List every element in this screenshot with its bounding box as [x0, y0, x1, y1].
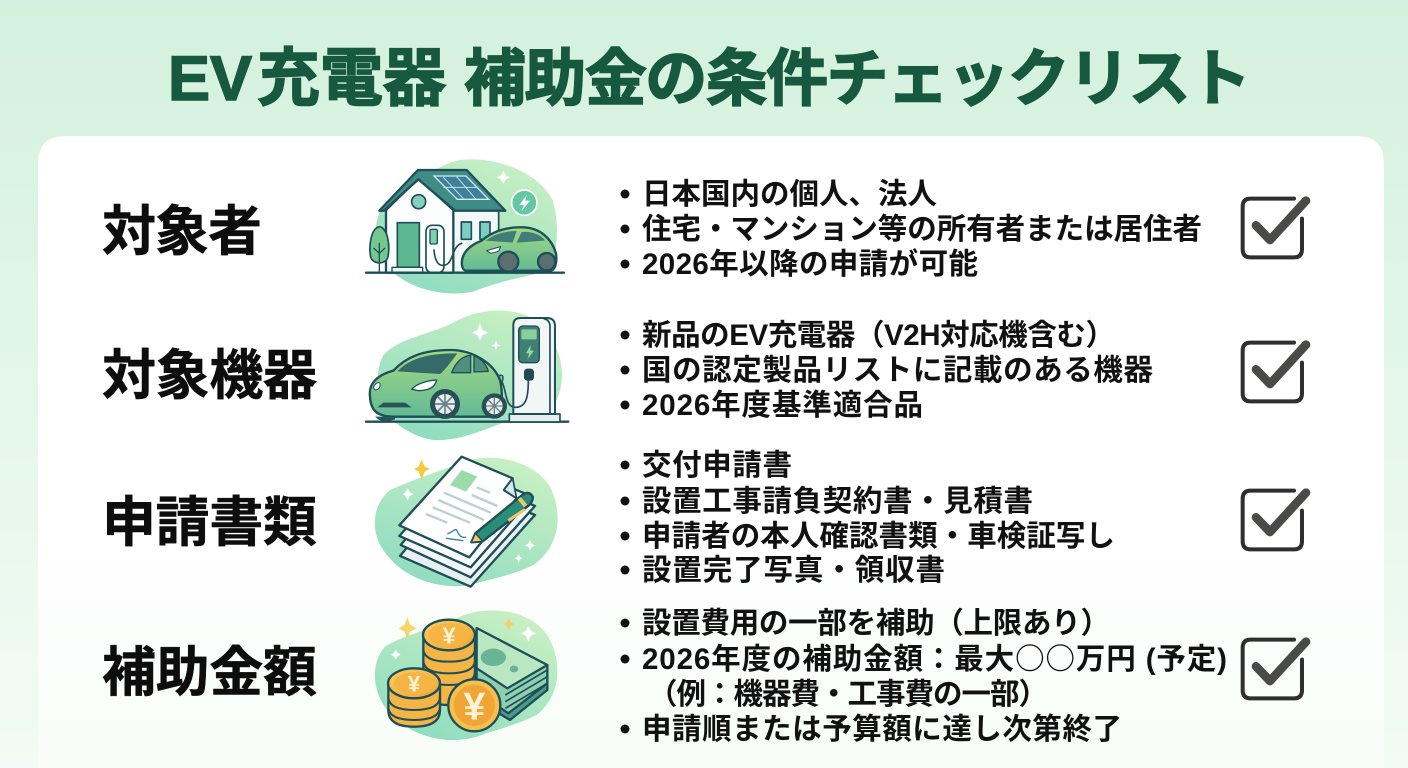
icon: checkbox: [1243, 640, 1306, 698]
bullet list: 補助金額: [620, 607, 1227, 746]
bullet list: 申請書類: 設置完了写真・領収書: [642, 554, 945, 587]
icon: stacked documents and pen: [375, 457, 558, 587]
icon: yen coins and banknotes: ¥: [408, 671, 421, 696]
bullet list: 対象機器: 国の認定製品リストに記載のある機器: [642, 354, 1153, 387]
icon: EV car at charging station: [366, 310, 568, 440]
bullet list: 対象機器: 新品のEV充電器（V2H対応機含む）: [642, 319, 1115, 352]
bullet list: 対象機器: [620, 319, 1153, 422]
bullet list: 対象者: [620, 178, 1202, 281]
bullet list: 補助金額: 申請順または予算額に達し次第終了: [642, 713, 1122, 746]
bullet list: 対象機器: 2026年度基準適合品: [642, 389, 923, 422]
bullet list: 補助金額: （例：機器費・工事費の一部）: [648, 678, 1048, 711]
heading: 対象機器: 対象機器: [102, 346, 317, 406]
bullet list: 申請書類: [620, 449, 1115, 587]
bullet list: 申請書類: 交付申請書: [642, 449, 792, 482]
bullet list: 対象者: 住宅・マンション等の所有者または居住者: [642, 213, 1202, 246]
heading: 補助金額: 補助金額: [102, 643, 317, 703]
icon: house with EV charger and car: [366, 159, 564, 294]
bullet list: 補助金額: 設置費用の一部を補助（上限あり）: [642, 607, 1110, 640]
bullet list: 補助金額: 2026年度の補助金額：最大○○万円 (予定): [642, 636, 1227, 678]
row: 対象者: [102, 159, 1306, 294]
row: 対象機器: [102, 310, 1306, 440]
title: 補助金の条件チェックリスト: [464, 45, 1251, 114]
bullet list: 対象者: 2026年以降の申請が可能: [642, 247, 978, 281]
icon: checkbox: [1243, 199, 1306, 257]
row: 申請書類: [102, 449, 1306, 587]
title: 充電器: [257, 44, 446, 114]
icon: checkbox: [1243, 343, 1306, 401]
icon: yen coins and banknotes: ¥: [463, 684, 485, 728]
row: 補助金額: [102, 607, 1306, 746]
icon: yen coins and banknotes: [375, 610, 557, 740]
bullet list: 申請書類: 設置工事請負契約書・見積書: [642, 485, 1033, 518]
bullet list: 対象者: 日本国内の個人、法人: [642, 178, 937, 211]
bullet list: 申請書類: 申請者の本人確認書類・車検証写し: [642, 520, 1115, 553]
title: EV: [168, 44, 252, 114]
heading: 対象者: 対象者: [102, 202, 262, 262]
icon: yen coins and banknotes: ¥: [442, 623, 455, 649]
panel: checklist card: [38, 136, 1384, 768]
icon: checkbox: [1243, 491, 1306, 549]
heading: 申請書類: 申請書類: [102, 493, 317, 553]
